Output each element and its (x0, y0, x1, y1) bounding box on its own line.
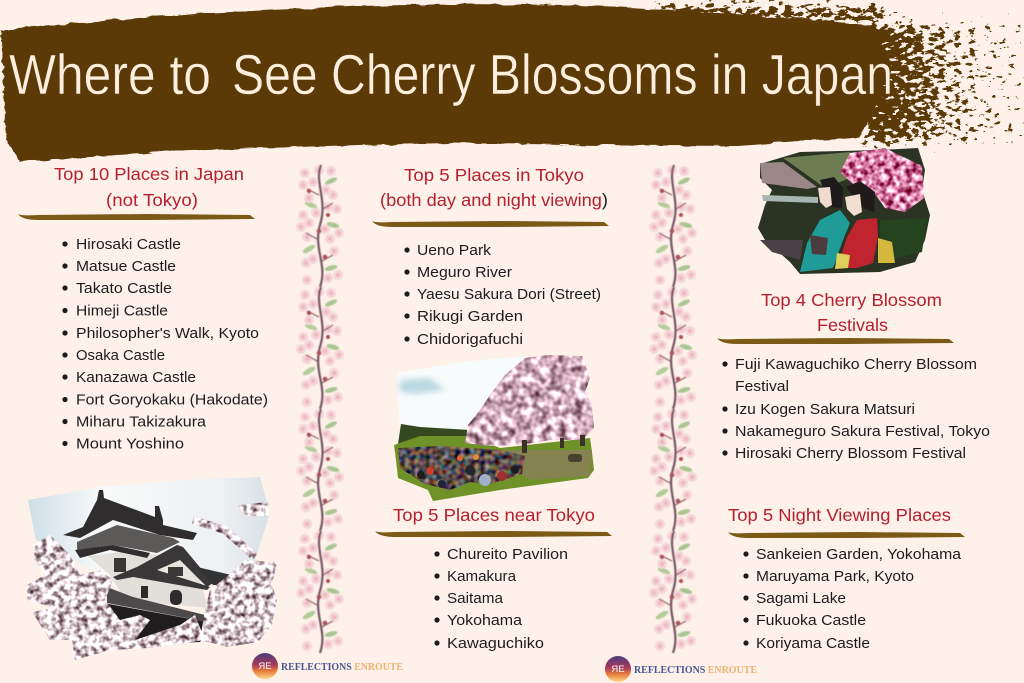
list: night viewing: Maruyama Park, Kyoto (756, 568, 914, 585)
list: top 10 places: Mount Yoshino (76, 436, 184, 452)
list: night viewing: Sagami Lake (756, 590, 846, 607)
photo: two women in kimono (758, 148, 930, 274)
heading: top 5 in Tokyo (380, 165, 608, 210)
logo: Reflections Enroute right (605, 656, 757, 682)
list: festivals (722, 356, 990, 462)
title: Where to (9, 43, 211, 107)
logo: Reflections Enroute right: REFLECTIONS ENROUTE (634, 665, 757, 676)
logo: Reflections Enroute left: ЯE (258, 661, 272, 672)
list: top 10 places: Takato Castle (76, 280, 172, 297)
panel: top 10 places in Japan (18, 164, 268, 452)
title: See Cherry Blossoms in Japan (232, 43, 893, 107)
list: night viewing: Koriyama Castle (756, 635, 870, 652)
list: near Tokyo: Saitama (447, 590, 504, 607)
title (9, 43, 893, 107)
list: festivals: Festival (735, 378, 789, 395)
list: top 5 in Tokyo: Meguro River (417, 264, 512, 281)
list: top 10 places (62, 236, 268, 452)
list: night viewing: Sankeien Garden, Yokohama (756, 546, 962, 563)
list: top 5 in Tokyo: Yaesu Sakura Dori (Street) (417, 286, 601, 303)
list: top 10 places: Matsue Castle (76, 258, 176, 275)
photo: castle with cherry blossoms (27, 477, 277, 660)
list: top 10 places: Miharu Takizakura (76, 414, 207, 430)
logo: Reflections Enroute right: ЯE (611, 664, 625, 675)
logo: Reflections Enroute left: REFLECTIONS ENROUTE (281, 662, 403, 673)
vine: cherry blossom branch left (296, 165, 344, 653)
heading: top 10 places: (not Tokyo) (106, 190, 198, 210)
logo: Reflections Enroute left (252, 653, 403, 679)
heading: night viewing: Top 5 Night Viewing Places (728, 505, 951, 525)
list: top 5 in Tokyo (404, 242, 601, 348)
list: top 5 in Tokyo: Rikugi Garden (417, 308, 523, 325)
list: top 10 places: Hirosaki Castle (76, 236, 181, 253)
heading: festivals (761, 290, 942, 335)
photo: picnic under cherry tree (394, 355, 594, 501)
list: top 10 places: Osaka Castle (76, 347, 165, 364)
list: near Tokyo: Chureito Pavilion (447, 546, 568, 563)
list: near Tokyo (434, 546, 568, 652)
list: top 5 in Tokyo: Ueno Park (417, 242, 492, 259)
list: top 10 places: Philosopher's Walk, Kyoto (76, 325, 259, 342)
list: near Tokyo: Kamakura (447, 568, 517, 585)
heading: top 10 places: Top 10 Places in Japan (54, 164, 244, 184)
list: top 10 places: Kanazawa Castle (76, 369, 196, 386)
panel: top 5 night viewing places (728, 505, 965, 652)
list: night viewing: Fukuoka Castle (756, 612, 866, 629)
list: festivals: Izu Kogen Sakura Matsuri (735, 401, 915, 418)
heading: near Tokyo: Top 5 Places near Tokyo (393, 505, 595, 525)
heading: festivals: Festivals (817, 315, 888, 335)
list: top 5 in Tokyo: Chidorigafuchi (417, 331, 523, 348)
header brush stroke banner (1, 2, 1024, 162)
heading: top 5 in Tokyo: Top 5 Places in Tokyo (404, 165, 584, 185)
list: near Tokyo: Yokohama (447, 612, 523, 629)
list: festivals: Fuji Kawaguchiko Cherry Blossom (735, 356, 977, 373)
panel: top 4 cherry blossom festivals (717, 290, 990, 462)
vine: cherry blossom branch right (649, 165, 697, 653)
list: festivals: Nakameguro Sakura Festival, Tokyo (735, 423, 990, 440)
list: night viewing (743, 546, 962, 652)
heading: festivals: Top 4 Cherry Blossom (761, 290, 942, 310)
panel: top 5 places in Tokyo (372, 165, 609, 348)
heading: top 10 places (54, 164, 244, 210)
list: top 10 places: Fort Goryokaku (Hakodate) (76, 392, 268, 408)
list: near Tokyo: Kawaguchiko (447, 635, 544, 652)
list: top 10 places: Himeji Castle (76, 302, 168, 320)
list: festivals: Hirosaki Cherry Blossom Festival (735, 445, 966, 462)
heading: top 5 in Tokyo: (both day and night viewing ) (380, 190, 608, 210)
panel: top 5 places near Tokyo (375, 505, 612, 652)
